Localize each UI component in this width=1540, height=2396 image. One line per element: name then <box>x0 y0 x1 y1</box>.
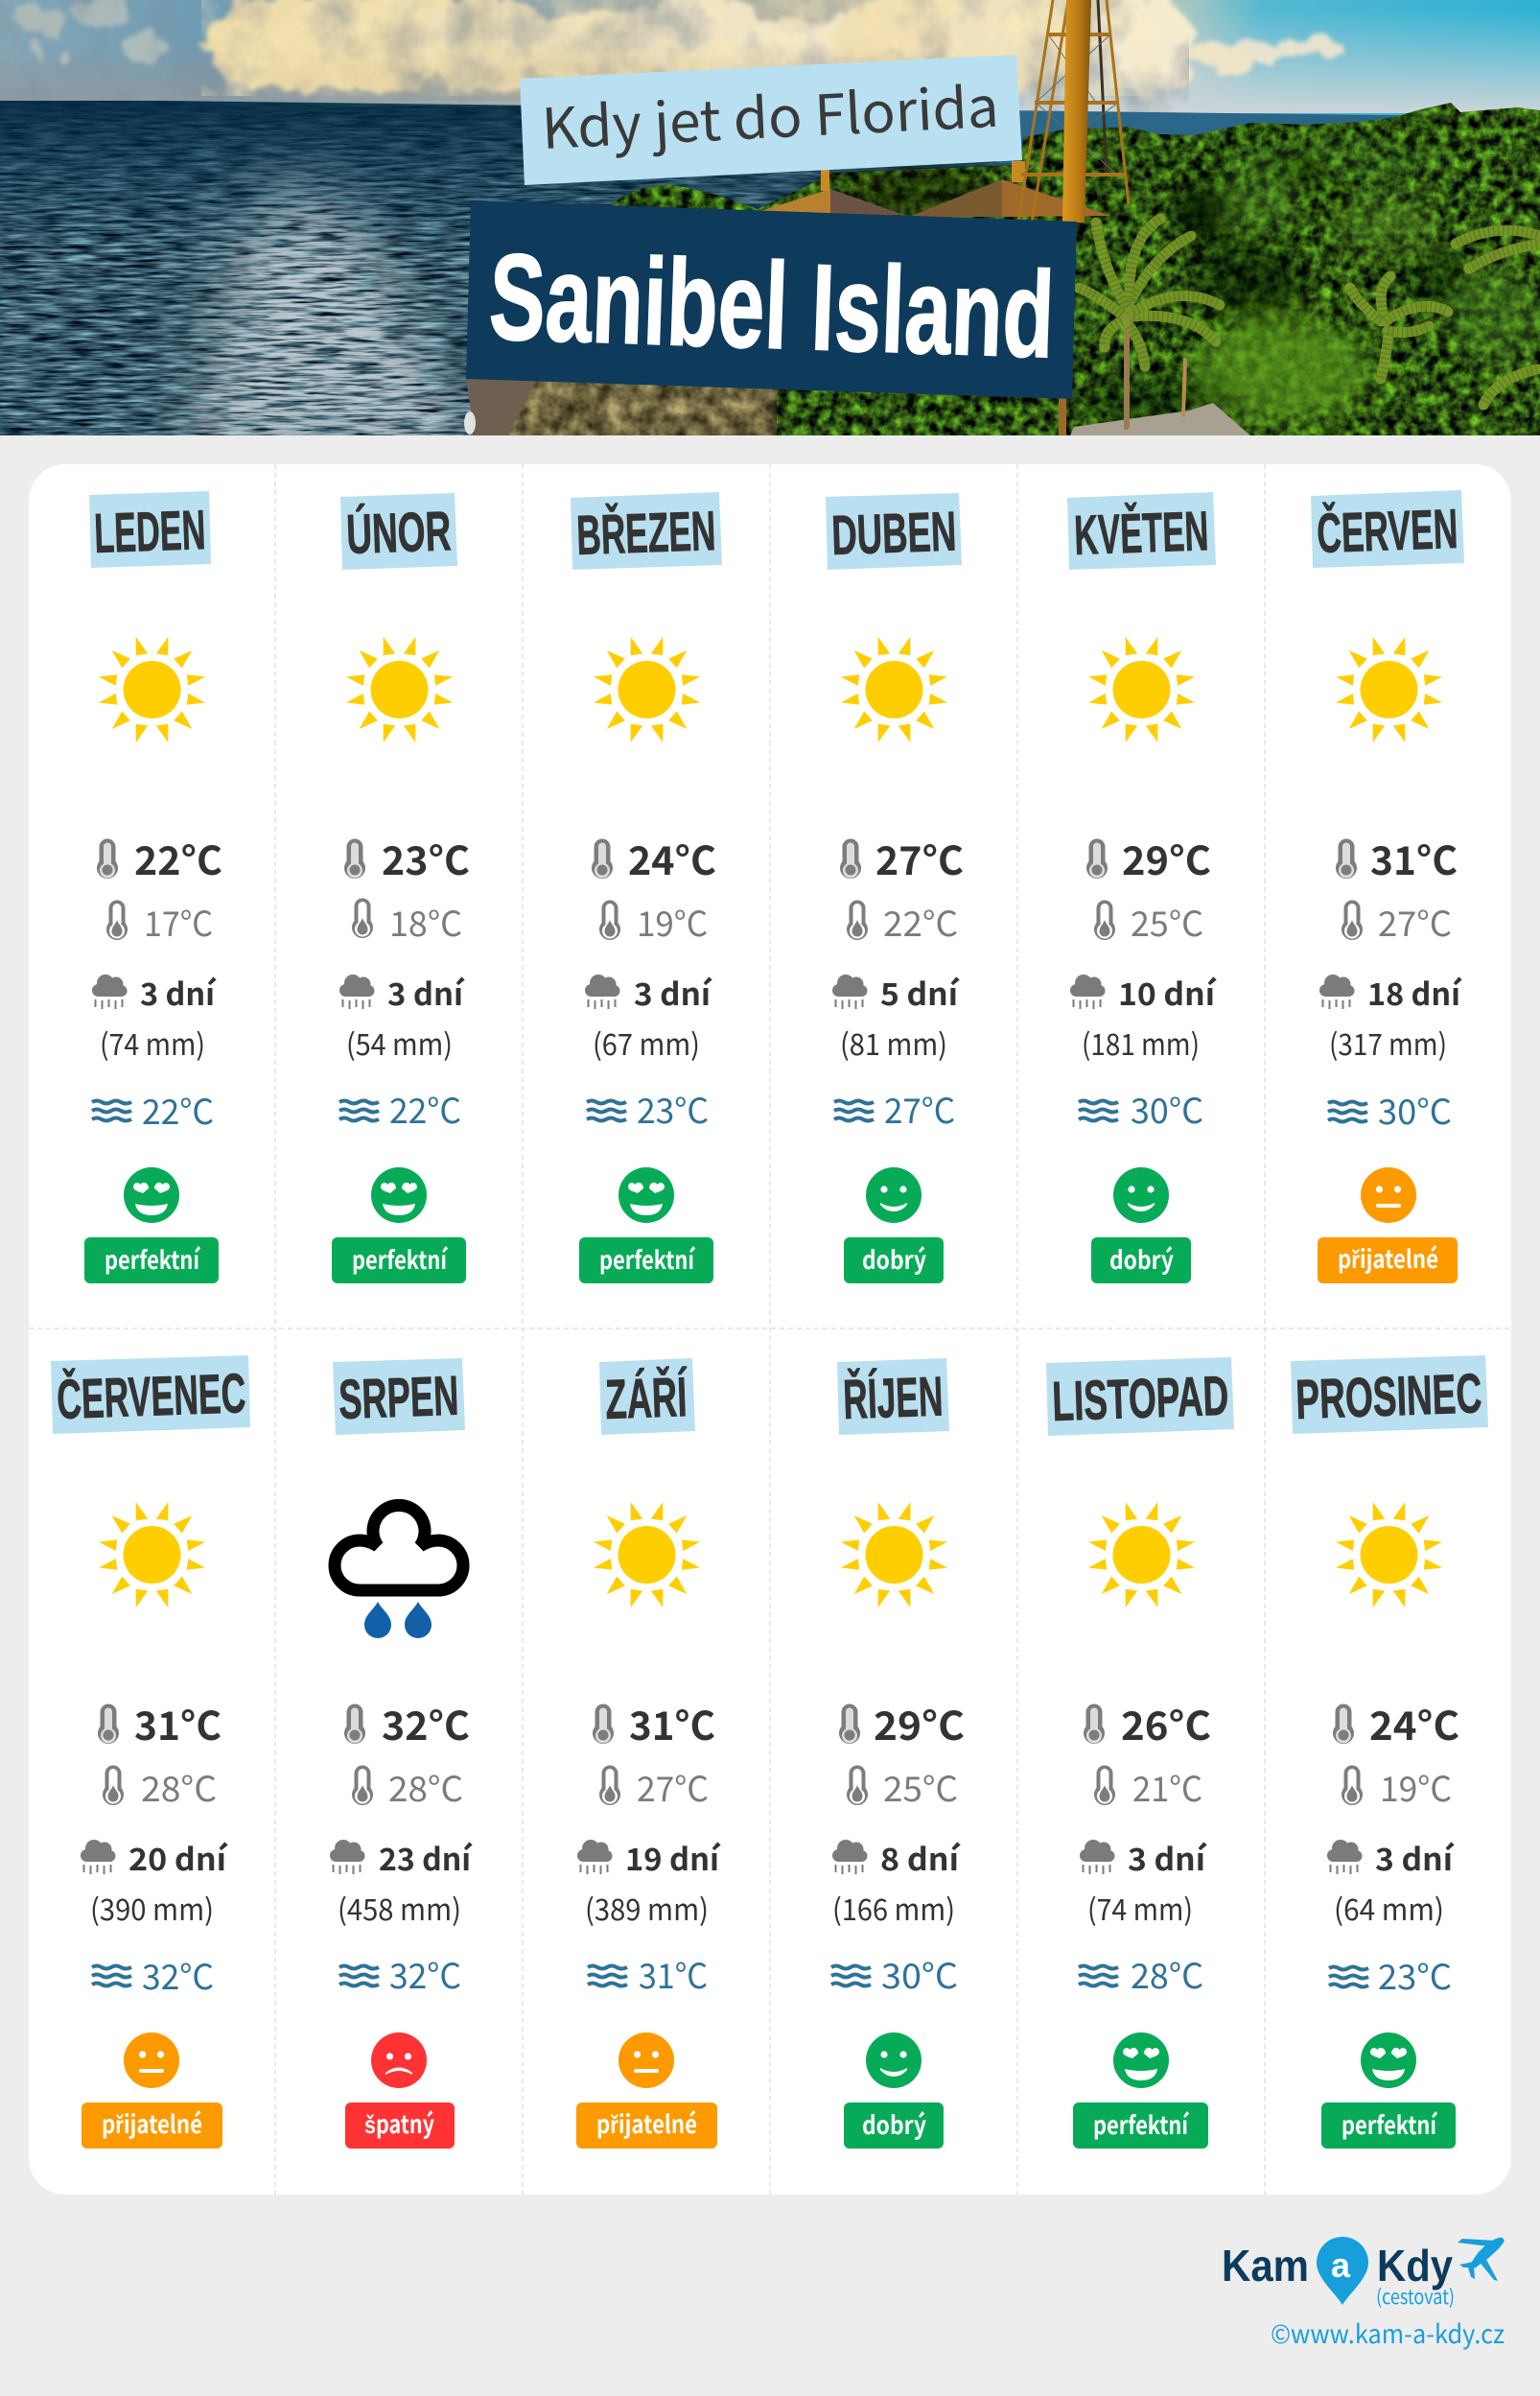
high temperature: 24°C <box>628 829 716 886</box>
forest <box>612 103 1540 435</box>
rainfall: (390 mm) <box>90 1886 214 1929</box>
weather icon: sun <box>346 637 453 742</box>
sea temperature <box>1328 1085 1452 1135</box>
rainfall: (81 mm) <box>840 1021 947 1064</box>
rating face <box>124 1167 179 1223</box>
month cell: říjen <box>831 1358 965 2149</box>
lighthouse tower <box>1018 0 1129 435</box>
icon: airplane <box>1458 2238 1505 2281</box>
rating face <box>618 1167 674 1223</box>
rain days: 5 dní <box>880 971 960 1015</box>
rating face <box>1361 2032 1416 2088</box>
low temperature <box>103 1762 217 1812</box>
month cell: květen <box>1067 492 1217 1283</box>
sea temperature <box>339 1949 461 1999</box>
rating badge <box>1091 1237 1191 1283</box>
rain days <box>92 971 217 1015</box>
sea temperature <box>587 1084 709 1134</box>
high temperature: 26°C <box>1121 1694 1211 1751</box>
title banner <box>466 200 1077 399</box>
low temperature <box>847 1762 958 1812</box>
sea temperature: 23°C <box>637 1084 709 1134</box>
rain days: 19 dní <box>625 1836 721 1880</box>
rain days: 23 dní <box>379 1836 473 1880</box>
rating badge: přijatelné <box>596 2105 697 2141</box>
rating badge: dobrý <box>1109 1241 1174 1277</box>
icon: map pin <box>1317 2237 1368 2305</box>
sea temperature: 22°C <box>142 1085 214 1135</box>
logo: Kam a Kdy: Kam <box>1222 2241 1309 2290</box>
month label: KVĚTEN <box>1073 500 1209 567</box>
sea temperature <box>1079 1949 1203 1999</box>
month label: BŘEZEN <box>575 500 716 567</box>
rating face <box>866 2032 922 2088</box>
weather icon: sun <box>594 1502 700 1608</box>
rainfall: (389 mm) <box>585 1886 709 1929</box>
month cell: listopad <box>1046 1357 1234 2149</box>
sea temperature <box>831 1949 958 1999</box>
rainfall: (67 mm) <box>593 1021 700 1064</box>
sea temperature: 30°C <box>881 1949 958 1999</box>
rating badge: perfektní <box>1342 2106 1438 2142</box>
rainfall: (317 mm) <box>1329 1021 1447 1064</box>
rating badge <box>1321 2102 1456 2149</box>
panel: monthly calendar card <box>29 464 1511 2195</box>
weather icon: sun <box>99 637 205 742</box>
month cell: červenec <box>51 1355 250 2149</box>
rating face <box>618 2032 674 2088</box>
thatched roofs <box>755 161 1110 217</box>
sea temperature: 30°C <box>1131 1084 1203 1134</box>
rating badge: perfektní <box>599 1241 696 1277</box>
rain days: 3 dní <box>1128 1836 1207 1880</box>
dry brush and beach <box>464 379 777 436</box>
low temperature <box>1094 897 1203 947</box>
weather icon: sun <box>1088 1502 1195 1608</box>
low temperature: 27°C <box>1378 897 1452 947</box>
rating badge: perfektní <box>1093 2106 1190 2142</box>
rating badge <box>844 2102 944 2149</box>
rain days <box>1327 1836 1455 1880</box>
sea temperature: 23°C <box>1378 1950 1452 2000</box>
month label <box>826 493 962 570</box>
weather icon: sun <box>1088 637 1195 742</box>
rating face <box>866 1167 922 1223</box>
sea temperature <box>834 1084 955 1134</box>
rainfall: (74 mm) <box>100 1021 205 1064</box>
logo: Kam a Kdy: a <box>1331 2245 1351 2285</box>
sea temperature: 32°C <box>389 1949 461 1999</box>
month label: ČERVENEC <box>56 1362 246 1431</box>
rating badge <box>576 2102 717 2149</box>
subtitle banner: Kdy jet do Florida <box>540 62 1000 165</box>
month label: SRPEN <box>338 1365 459 1431</box>
month label <box>340 493 457 570</box>
rainfall: (54 mm) <box>346 1021 453 1064</box>
low temperature: 22°C <box>883 897 958 947</box>
weather icon: sun <box>1336 637 1442 742</box>
rating face <box>371 1167 427 1223</box>
sea temperature: 22°C <box>389 1084 461 1134</box>
month cell: duben <box>826 493 964 1283</box>
low temperature: 27°C <box>637 1762 709 1812</box>
low temperature: 28°C <box>388 1762 463 1812</box>
rain days: 8 dní <box>880 1836 961 1880</box>
low temperature <box>599 897 708 947</box>
rating badge: dobrý <box>862 1241 926 1277</box>
month label: ZÁŘÍ <box>604 1366 689 1431</box>
low temperature: 17°C <box>144 897 213 947</box>
rain days <box>330 1836 473 1880</box>
month label: ŘÍJEN <box>842 1365 944 1431</box>
low temperature: 18°C <box>389 897 462 947</box>
rainfall: (181 mm) <box>1082 1021 1200 1064</box>
sea temperature: 30°C <box>1378 1085 1452 1135</box>
month label: LEDEN <box>93 499 206 565</box>
sea temperature <box>339 1084 461 1134</box>
low temperature <box>1094 1762 1202 1812</box>
month cell: leden <box>84 491 222 1283</box>
low temperature: 28°C <box>141 1762 217 1812</box>
rating badge <box>579 1237 713 1283</box>
rating badge <box>1073 2102 1208 2149</box>
high temperature: 23°C <box>382 829 470 886</box>
high temperature: 31°C <box>629 1694 715 1751</box>
sand path <box>1070 403 1250 435</box>
logo: Kam a Kdy: (cestovat) <box>1376 2282 1455 2311</box>
low temperature: 25°C <box>1131 897 1203 947</box>
high temperature: 27°C <box>875 829 964 886</box>
rain days <box>1319 971 1462 1015</box>
rain days: 3 dní <box>634 971 712 1015</box>
rain days: 20 dní <box>128 1836 228 1880</box>
month cell: červen <box>1311 490 1464 1283</box>
month cell: srpen <box>330 1358 473 2149</box>
website credit: ©www.kam-a-kdy.cz <box>1271 2314 1505 2351</box>
rating badge: přijatelné <box>102 2105 202 2141</box>
rating badge <box>332 1237 466 1283</box>
month label: ÚNOR <box>345 500 452 566</box>
low temperature <box>352 1762 463 1812</box>
rating face <box>1113 1167 1169 1223</box>
rating badge <box>844 1237 944 1283</box>
rain days <box>1080 1836 1207 1880</box>
rainfall: (74 mm) <box>1087 1886 1193 1929</box>
rain days: 10 dní <box>1118 971 1217 1015</box>
rating badge: dobrý <box>862 2106 926 2142</box>
rainfall: (64 mm) <box>1334 1886 1444 1929</box>
sea temperature: 32°C <box>142 1950 214 2000</box>
rain days <box>339 971 465 1015</box>
high temperature: 24°C <box>1369 1694 1459 1751</box>
sea temperature <box>1329 1950 1452 2000</box>
weather icon: sun <box>594 637 700 742</box>
rating face <box>1113 2032 1169 2088</box>
high temperature: 31°C <box>1370 829 1458 886</box>
sea temperature: 28°C <box>1131 1949 1203 1999</box>
rain days: 3 dní <box>387 971 465 1015</box>
weather icon: sun <box>99 1502 205 1608</box>
rating face <box>1361 1167 1416 1223</box>
rain days <box>1070 971 1217 1015</box>
low temperature: 19°C <box>637 897 708 947</box>
rain days <box>81 1836 228 1880</box>
high temperature <box>593 1694 715 1751</box>
distant sea <box>997 110 1402 163</box>
rating badge: špatný <box>364 2105 434 2141</box>
month label <box>333 1358 465 1435</box>
month label <box>1046 1357 1234 1436</box>
rating face <box>124 2032 179 2088</box>
sea temperature <box>92 1085 214 1135</box>
month label <box>89 491 211 568</box>
low temperature <box>106 897 213 947</box>
low temperature: 21°C <box>1132 1762 1202 1812</box>
sea temperature <box>588 1949 708 1999</box>
sea temperature: 31°C <box>639 1949 708 1999</box>
rating badge <box>1318 1237 1458 1283</box>
sea temperature <box>1079 1084 1203 1134</box>
month cell: září <box>576 1358 721 2149</box>
title banner: Sanibel Island <box>487 228 1056 385</box>
rain days <box>832 1836 961 1880</box>
rain days: 18 dní <box>1367 971 1462 1015</box>
month label <box>1067 492 1216 570</box>
high temperature: 22°C <box>134 829 222 886</box>
rainfall: (458 mm) <box>338 1886 461 1929</box>
rating badge: přijatelné <box>1338 1240 1438 1276</box>
rain days <box>577 1836 721 1880</box>
rain days <box>832 971 960 1015</box>
month label <box>837 1358 949 1435</box>
low temperature <box>847 897 958 947</box>
low temperature <box>1342 897 1452 947</box>
high temperature: 32°C <box>382 1694 470 1751</box>
rating badge <box>84 1237 219 1283</box>
rating badge <box>345 2102 455 2149</box>
weather icon: sun <box>1336 1502 1442 1608</box>
month label <box>51 1355 250 1434</box>
header photo: sea, clouds, lighthouse and forest <box>0 0 1540 437</box>
sea <box>0 101 1012 435</box>
low temperature <box>352 897 462 947</box>
month label <box>1311 490 1464 568</box>
high temperature <box>1333 1694 1459 1751</box>
high temperature: 29°C <box>1122 829 1211 886</box>
high temperature: 31°C <box>134 1694 222 1751</box>
weather icon: sun <box>841 637 947 742</box>
rain days <box>585 971 712 1015</box>
weather icon: sun <box>841 1502 947 1608</box>
month label <box>571 492 722 570</box>
month label <box>599 1358 695 1435</box>
rating badge: perfektní <box>105 1241 201 1277</box>
high temperature: 29°C <box>874 1694 965 1751</box>
high temperature <box>1084 1694 1211 1751</box>
palm trees <box>1079 219 1537 427</box>
month cell: únor <box>332 493 470 1283</box>
rating badge <box>82 2102 222 2149</box>
month label: LISTOPAD <box>1051 1365 1229 1433</box>
rain days: 3 dní <box>1375 1836 1455 1880</box>
logo: Kam a Kdy <box>1222 2237 1505 2311</box>
month label: DUBEN <box>830 500 957 567</box>
rating face <box>371 2032 427 2088</box>
rainfall: (166 mm) <box>832 1886 955 1929</box>
month cell: březen <box>571 492 722 1283</box>
weather icon: rain cloud <box>335 1505 463 1638</box>
month cell: prosinec <box>1291 1355 1488 2149</box>
rain days: 3 dní <box>140 971 217 1015</box>
logo: Kam a Kdy: Kdy <box>1377 2241 1453 2290</box>
sea temperature: 27°C <box>884 1084 955 1134</box>
rating badge: perfektní <box>352 1241 449 1277</box>
low temperature: 19°C <box>1380 1762 1452 1812</box>
sky and clouds <box>0 0 1540 120</box>
low temperature <box>1342 1762 1452 1812</box>
sea temperature <box>92 1950 214 2000</box>
low temperature: 25°C <box>883 1762 958 1812</box>
low temperature <box>599 1762 709 1812</box>
